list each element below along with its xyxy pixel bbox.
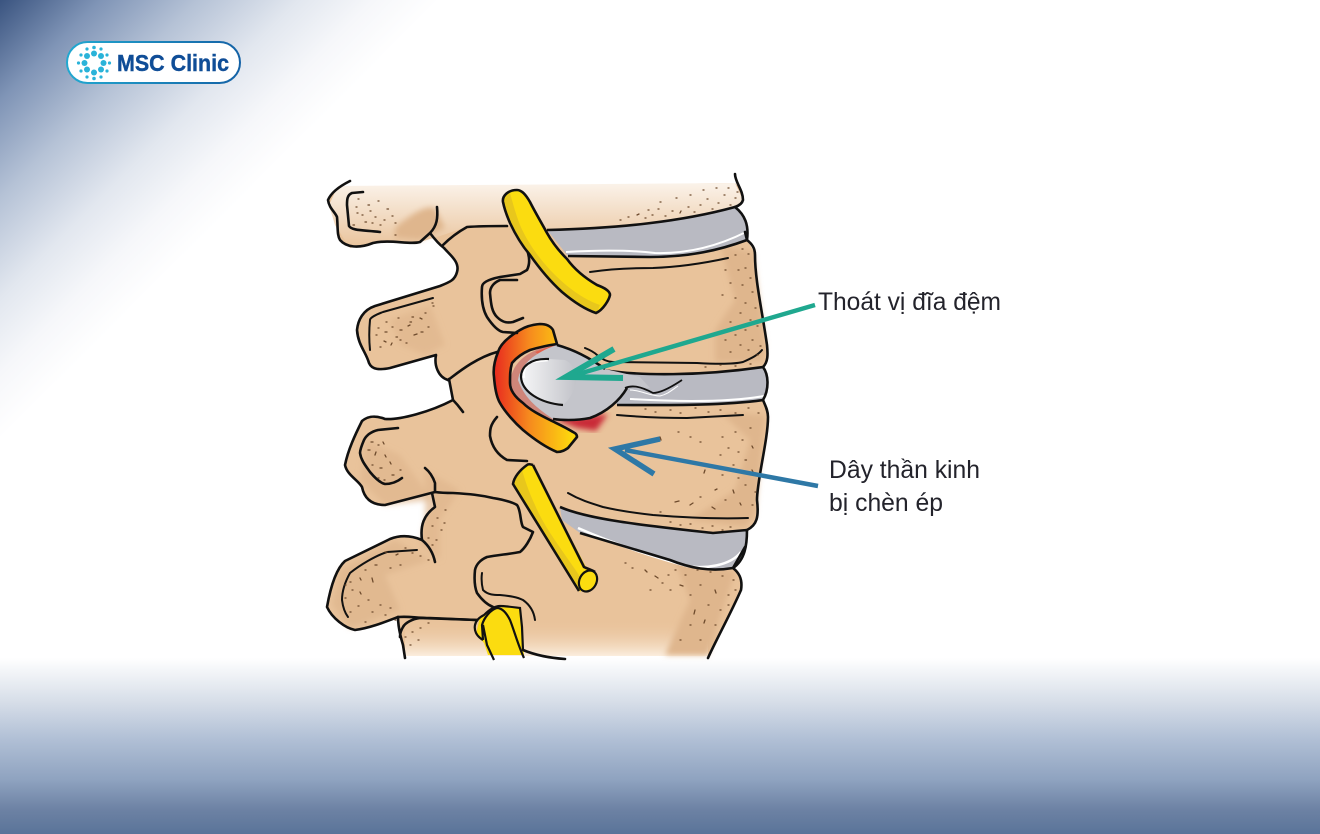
nerve root: upper: [503, 190, 610, 313]
background: bottom gradient band: [0, 658, 1320, 834]
spine body silhouette: [327, 183, 768, 656]
bone speckles: [345, 188, 761, 645]
pink tissue: [510, 344, 575, 421]
disc: middle: [603, 367, 768, 405]
logo: MSC Clinic badge: [67, 42, 240, 83]
disc: upper: [547, 207, 748, 257]
herniated disc: [494, 324, 682, 452]
nerve root: lower: [475, 606, 524, 660]
bulging disc: [518, 345, 650, 420]
icon: clinic logo ring of dots: [77, 46, 111, 80]
top fade of upper vertebra: [329, 183, 743, 248]
label: herniated disc: Thoát vị đĩa đệm: [818, 288, 1001, 316]
nerve root: middle: [513, 464, 601, 595]
label: compressed nerve: Dây thần kinh: [829, 456, 980, 484]
vertebra shading: [332, 207, 765, 655]
arrow: green pointer to herniated disc: [566, 305, 815, 378]
red inflammation shadow: [553, 414, 608, 431]
bottom fade of lower vertebra: [405, 620, 708, 656]
disc crack: [625, 380, 682, 393]
inflamed ring: [494, 324, 577, 452]
arrow: blue pointer to compressed nerve: [615, 439, 818, 486]
background: top-left corner gradient: [0, 0, 440, 440]
disc nucleus: [521, 359, 576, 405]
label: compressed nerve: bị chèn ép: [829, 489, 943, 517]
anatomy outlines: [327, 174, 768, 659]
illustration: lumbar spine with herniated disc: [327, 174, 768, 660]
logo wordmark: MSC Clinic: [117, 50, 229, 76]
disc: lower: [560, 507, 747, 570]
